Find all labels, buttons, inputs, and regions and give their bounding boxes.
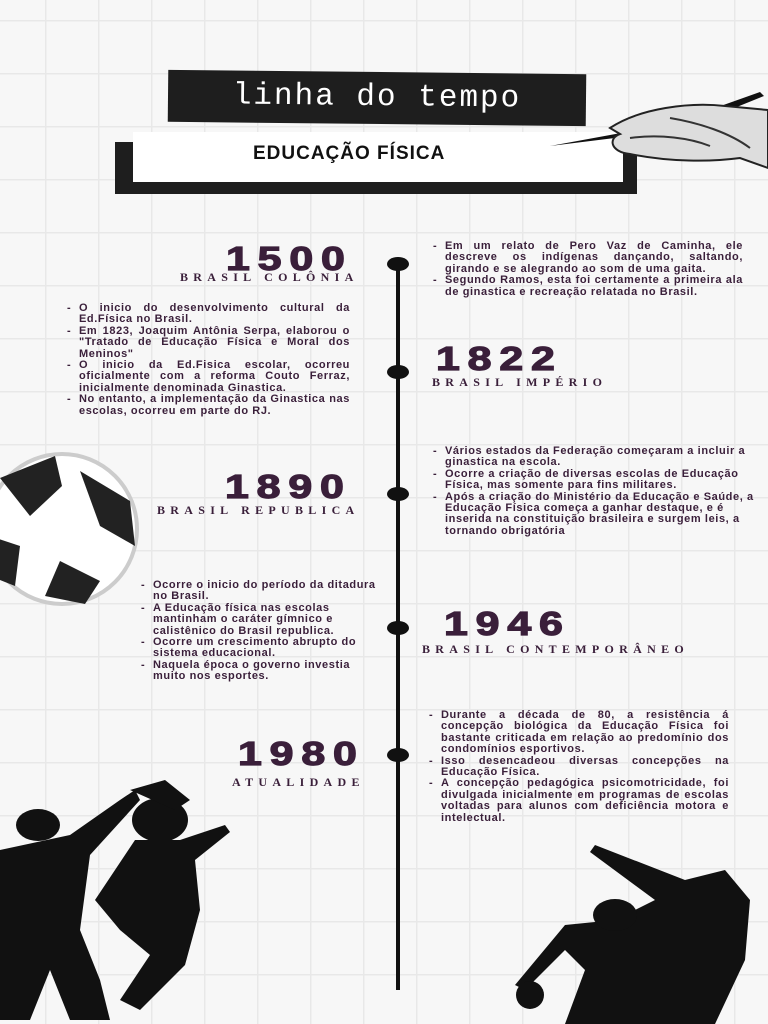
title: linha do tempo: linha do tempo: [233, 78, 521, 117]
entry 1946: [141, 579, 376, 682]
subtitle: educacao fisica: EDUCAÇÃO FÍSICA: [253, 143, 445, 164]
entry 1500: O inicio do desenvolvimento cultural da Ed.Física no Brasil.: [79, 302, 350, 325]
icon: dancing couple silhouette: [0, 780, 230, 1020]
entry 1500: [67, 240, 359, 417]
text: 1946: [444, 605, 571, 642]
entry 1980: ATUALIDADE: [232, 775, 365, 789]
title: linha do tempo: [168, 70, 586, 126]
entry 1980: [232, 735, 365, 789]
entry 1980: 1980: [238, 735, 365, 772]
text: Vários estados da Federação começaram a incluir a ginastica na escola.: [445, 445, 745, 468]
entry 1946: Ocorre o inicio do período da ditadura no Brasil.: [153, 579, 376, 602]
entry 1822: BRASIL IMPÉRIO: [432, 375, 607, 389]
subtitle: educacao fisica: [115, 132, 637, 194]
entry 1500: Em 1823, Joaquim Antônia Serpa, elaborou o "Tratado de Educação Física e Moral dos Meninos": [79, 325, 350, 360]
text: A concepção pedagógica psicomotricidade, foi divulgada inicialmente em programas de escolas voltadas para alunos com deficiência motora e intelectual.: [441, 777, 729, 824]
text: Isso desencadeou diversas concepções na Educação Física.: [441, 755, 729, 778]
entry 1822: [432, 340, 607, 389]
entry 1500: O inicio da Ed.Fisica escolar, ocorreu oficialmente com a reforma Couto Ferraz, inicialmente denominada Ginastica.: [79, 359, 350, 394]
entry 1946: Ocorre um crescimento abrupto do sistema educacional.: [153, 636, 356, 659]
text: Durante a década de 80, a resistência á concepção biológica da Educação Física foi bastante criticada em relação ao predomínio dos condomínios esportivos.: [441, 709, 729, 755]
entry 1500: No entanto, a implementação da Ginastica nas escolas, ocorreu em parte do RJ.: [79, 393, 350, 417]
entry 1500 right text: Segundo Ramos, esta foi certamente a primeira ala de ginastica e recreação relatada no Brasil.: [445, 274, 743, 298]
text: Ocorre a criação de diversas escolas de Educação Física, mas somente para fins militares.: [445, 468, 739, 491]
icon: soccer ball: [0, 452, 139, 606]
icon: basketball player silhouette: [515, 845, 750, 1024]
text: Após a criação do Ministério da Educação e Saúde, a Educação Física começa a ganhar destaque, e é inserida na constituição brasileira e surgem leis, a tornando obrigatória: [445, 491, 754, 537]
entry 1890: BRASIL REPUBLICA: [157, 503, 360, 517]
entry 1946: A Educação física nas escolas mantinham o caráter gímnico e calistênico do Brasil republica.: [153, 602, 334, 637]
entry 1822: 1822: [436, 340, 563, 377]
entry 1890: 1890: [225, 468, 352, 505]
icon: hand with brush: [550, 92, 768, 169]
timeline line: [396, 262, 400, 990]
text: BRASIL CONTEMPORÂNEO: [422, 642, 689, 656]
entry 1500: BRASIL COLÔNIA: [180, 270, 359, 284]
entry 1890: [157, 468, 360, 517]
entry 1500 right text: [433, 240, 743, 298]
entry 1500 right text: Em um relato de Pero Vaz de Caminha, ele descreve os indígenas dançando, saltando, girando e se alegrando ao som de uma gaita.: [445, 240, 743, 275]
entry 1946: Naquela época o governo investia muito nos esportes.: [153, 659, 350, 682]
entry 1500: 1500: [226, 240, 353, 277]
